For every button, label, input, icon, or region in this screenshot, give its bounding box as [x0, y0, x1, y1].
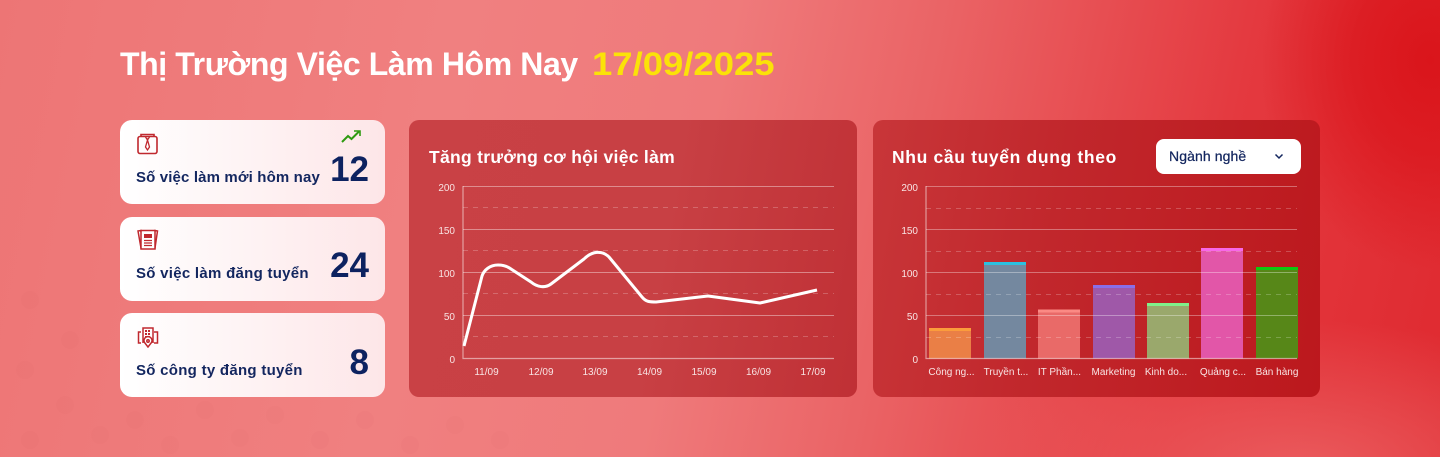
- bar chart: 50: [907, 312, 918, 323]
- bar chart: [901, 183, 1298, 378]
- icon: growth arrow: [341, 130, 361, 143]
- line chart: [438, 183, 834, 378]
- bar: Truyền thông: [984, 262, 1026, 358]
- label: Số công ty đăng tuyển: [136, 362, 303, 379]
- bar: Marketing: [1093, 285, 1135, 358]
- title: [120, 46, 775, 82]
- panel: hiring demand: [873, 120, 1320, 397]
- icon: CV documents: [137, 230, 158, 250]
- label: Số việc làm đăng tuyển: [136, 265, 309, 282]
- panel title: Nhu cầu tuyển dụng theo: [892, 147, 1117, 167]
- bar chart: Truyền t...: [984, 366, 1028, 378]
- dropdown label: Ngành nghề: [1169, 148, 1246, 164]
- value: 12: [330, 150, 369, 189]
- line chart: 0: [449, 355, 455, 366]
- icon: briefcase with tie: [137, 134, 158, 154]
- bar chart: IT Phần...: [1038, 366, 1081, 378]
- panel title: Tăng trưởng cơ hội việc làm: [429, 147, 675, 167]
- line chart: 13/09: [582, 367, 608, 378]
- line chart: 200: [438, 183, 455, 194]
- bar: Công nghệ: [929, 328, 971, 358]
- bar: IT Phần mềm: [1038, 310, 1080, 358]
- card: hiring companies: [120, 313, 385, 397]
- line chart: 150: [438, 226, 455, 237]
- bar chart: 150: [901, 226, 918, 237]
- date: 17/09/2025: [592, 46, 775, 82]
- bar chart: Marketing: [1092, 367, 1135, 378]
- bar chart: Quảng c...: [1200, 367, 1246, 378]
- line chart: 100: [438, 269, 455, 280]
- value: 8: [350, 343, 369, 382]
- line chart: 11/09: [474, 367, 499, 378]
- dropdown: [1156, 139, 1301, 174]
- bar chart: 0: [912, 355, 918, 366]
- bar: Kinh doanh: [1147, 303, 1189, 358]
- line chart: 16/09: [746, 367, 771, 378]
- line chart: 15/09: [691, 367, 717, 378]
- line chart: 50: [444, 312, 455, 323]
- panel: job opportunity growth: [409, 120, 857, 397]
- value: 24: [330, 246, 369, 285]
- bar: Quảng cáo: [1201, 248, 1243, 358]
- title text: Thị Trường Việc Làm Hôm Nay: [120, 46, 578, 82]
- card: posted jobs: [120, 217, 385, 301]
- line chart: 17/09: [800, 367, 826, 378]
- bar chart: 100: [901, 269, 918, 280]
- icon: building with pin: [138, 327, 158, 348]
- card: new jobs today: [120, 120, 385, 204]
- bar chart: Bán hàng: [1256, 367, 1298, 378]
- line chart: 12/09: [528, 367, 554, 378]
- icon: chevron: [1275, 154, 1283, 159]
- bar chart: Công ng...: [928, 367, 975, 378]
- bar chart: 200: [901, 183, 918, 194]
- label: Số việc làm mới hôm nay: [136, 169, 320, 186]
- line chart: 14/09: [637, 367, 662, 378]
- bar: Bán hàng: [1256, 267, 1298, 358]
- bar chart: Kinh do...: [1145, 367, 1187, 378]
